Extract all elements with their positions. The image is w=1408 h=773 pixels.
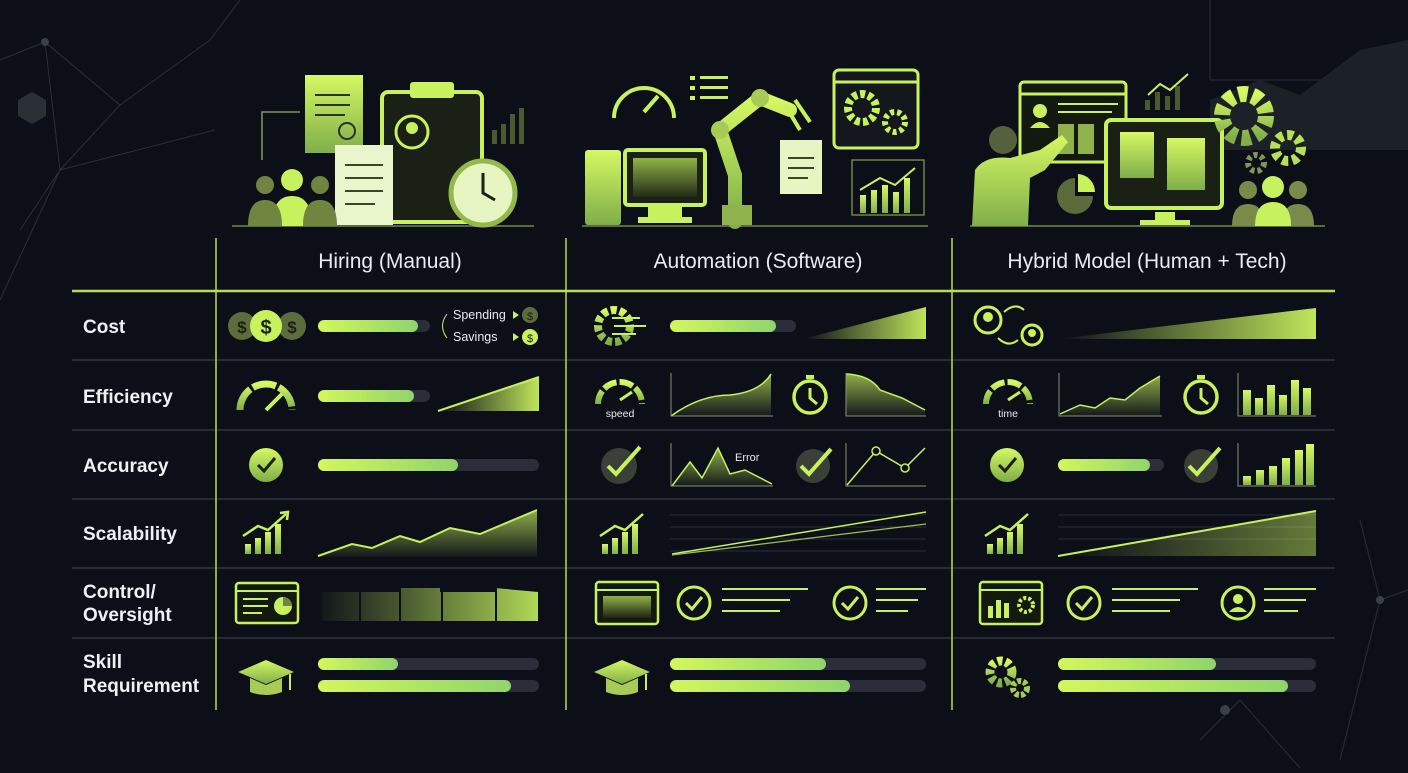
row: efficiency — [240, 373, 1316, 420]
row: cost: $ — [260, 317, 272, 339]
row: control / oversight — [236, 582, 1316, 624]
row labels: Accuracy — [83, 456, 169, 477]
row labels: Skill — [83, 652, 122, 673]
row labels — [83, 317, 200, 697]
row: cost: $ — [237, 318, 247, 337]
row labels: Oversight — [83, 605, 172, 626]
column headers — [318, 250, 1287, 273]
column headers: Hybrid Model (Human + Tech) — [1007, 250, 1287, 273]
row labels: Control/ — [83, 582, 157, 603]
illustration: hiring manual — [232, 75, 534, 226]
column headers: Automation (Software) — [654, 250, 862, 273]
row labels: Scalability — [83, 524, 177, 545]
row: cost: $ — [527, 311, 533, 323]
row: cost — [228, 306, 1316, 345]
row labels: Requirement — [83, 676, 200, 697]
row: cost: $ — [287, 318, 297, 337]
row: accuracy: Error — [735, 452, 760, 464]
illustration: hybrid model — [970, 74, 1325, 226]
row: scalability — [243, 510, 1316, 557]
row: efficiency: time — [998, 408, 1018, 420]
row labels: Efficiency — [83, 387, 173, 408]
row: efficiency: speed — [606, 408, 634, 420]
row: cost: $ — [527, 333, 533, 345]
row: cost: Savings — [453, 330, 497, 344]
row: cost: Spending — [453, 308, 506, 322]
illustration: automation software — [582, 70, 928, 226]
row labels: Cost — [83, 317, 126, 338]
row: skill requirement — [238, 658, 1316, 695]
column headers: Hiring (Manual) — [318, 250, 462, 273]
row: accuracy — [249, 443, 1316, 486]
grid lines — [72, 360, 1335, 638]
